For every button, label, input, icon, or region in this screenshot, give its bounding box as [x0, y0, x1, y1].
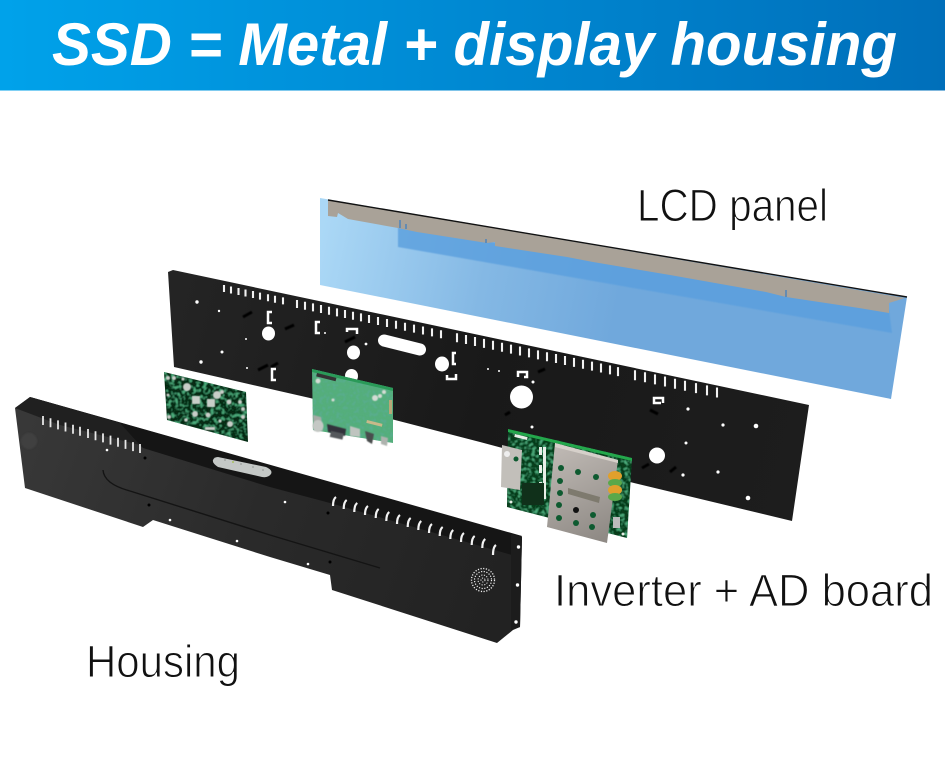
- label: LCD panel: LCD panel: [637, 180, 828, 231]
- mounting shadows: [243, 312, 355, 370]
- panel: housing: [15, 397, 522, 643]
- panel: metal back plate: [168, 270, 809, 521]
- left perforation: [21, 433, 37, 449]
- panel: power board (left PCB): [164, 372, 248, 442]
- title: SSD = Metal + display housing: [52, 11, 897, 78]
- shield plate: [547, 443, 618, 543]
- bracket cut-outs: [268, 312, 663, 403]
- connectors: [312, 415, 388, 446]
- panel: LCD panel layer: [320, 198, 907, 399]
- icon: speaker perforations: [472, 568, 494, 592]
- status indicator strip: [213, 457, 271, 477]
- side mounting flange: [511, 534, 522, 630]
- title banner: [0, 0, 945, 90]
- side bracket: [501, 445, 522, 490]
- label: inverter and AD board: Inverter + AD board: [554, 565, 933, 616]
- screw points: [106, 449, 309, 565]
- top bend: [30, 397, 522, 555]
- label: housing: Housing: [86, 636, 240, 687]
- toroid coils: [608, 471, 622, 481]
- panel: AD board (middle PCB): [312, 369, 393, 446]
- mounting holes: [195, 300, 758, 500]
- vent slots left: [43, 416, 140, 453]
- panel: inverter board (right PCB with shield): [501, 429, 632, 543]
- vent slots right: [333, 497, 496, 555]
- vent slots: [224, 285, 717, 398]
- groove line: [103, 470, 380, 568]
